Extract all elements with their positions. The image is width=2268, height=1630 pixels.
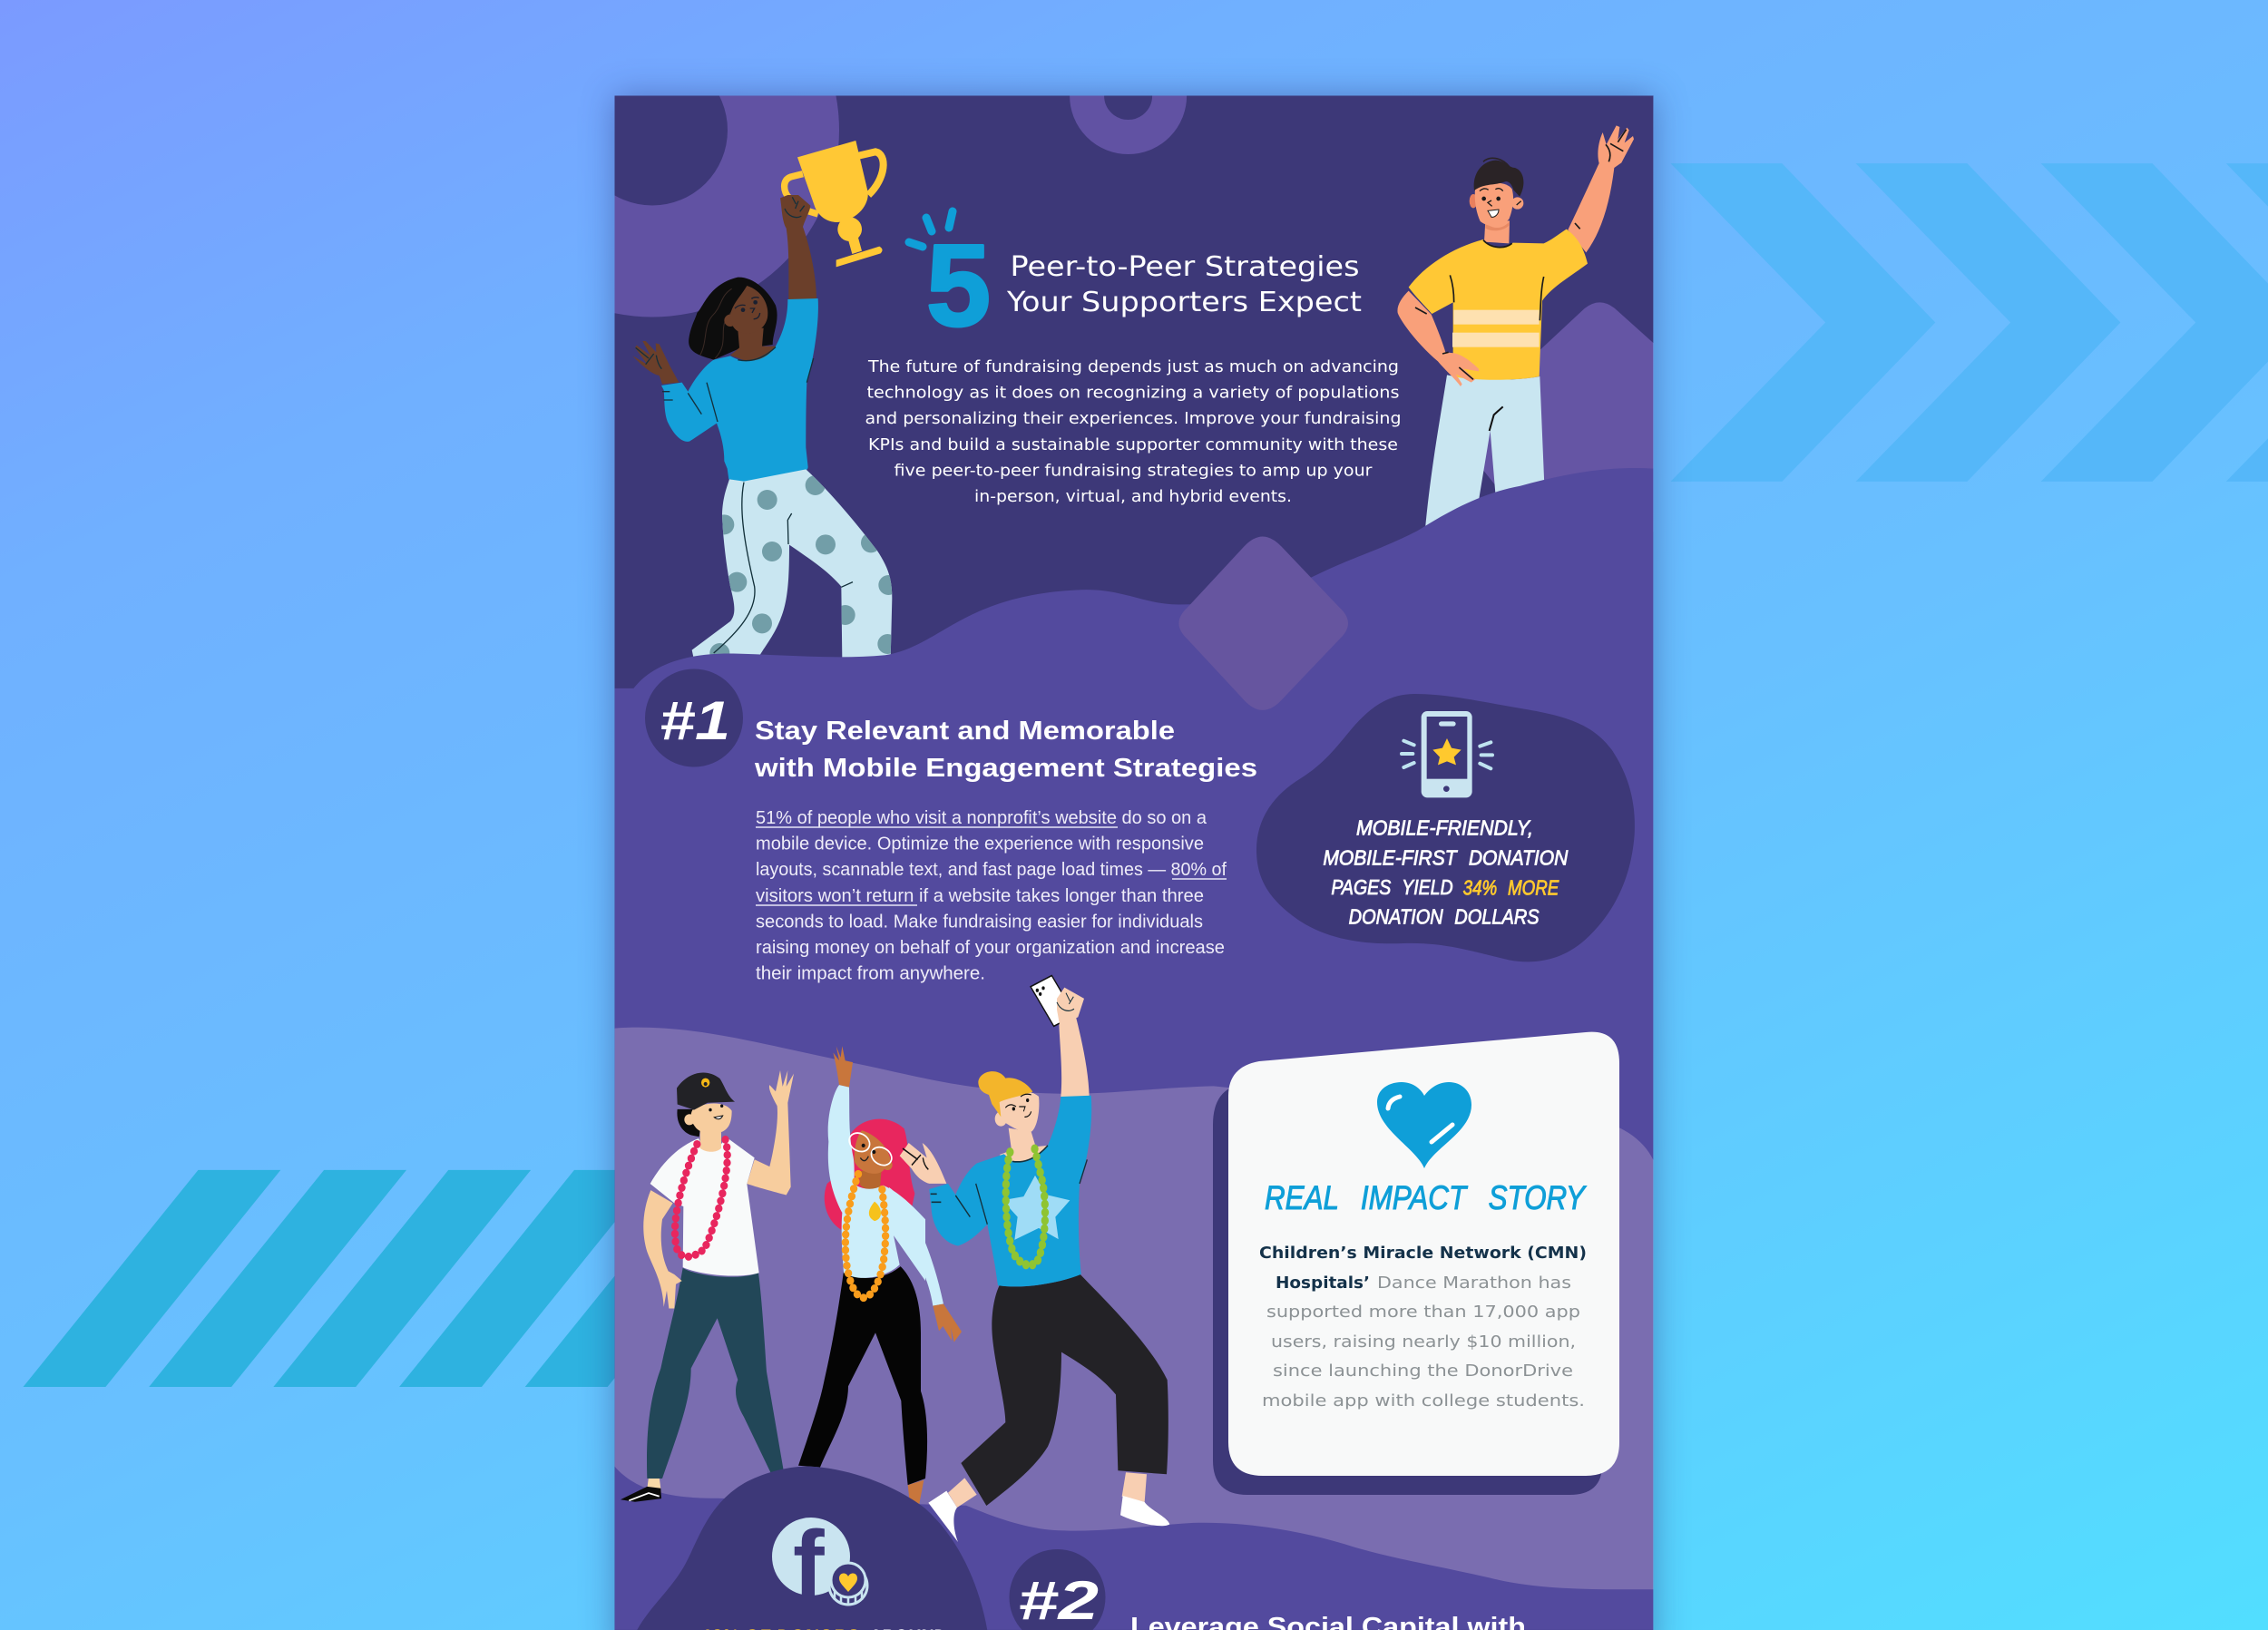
heading: strategy 1: with Mobile Engagement Strategies [754, 754, 1257, 783]
icon: phone with star [1402, 711, 1492, 797]
icon: number five with rays: 5 [926, 221, 991, 351]
body text: strategy 1 [756, 807, 1227, 984]
heading: strategy 1: Stay Relevant and Memorable [755, 717, 1175, 746]
icon: number five with rays [905, 207, 989, 328]
callout text: MOBILE-FIRST DONATION [1323, 845, 1569, 869]
decorative rounded diamond [1178, 537, 1348, 710]
callout: mobile stat [1256, 694, 1635, 961]
trophy [785, 141, 884, 267]
illustration: man waving [1397, 125, 1634, 532]
pants [1425, 375, 1544, 532]
wave: lilac section background [615, 1028, 1653, 1589]
illustration: woman taking selfie with green beads [889, 976, 1169, 1542]
title [1006, 251, 1362, 318]
decorative donut top [1087, 54, 1169, 137]
infographic panel [615, 96, 1653, 1630]
neck and head [1000, 1128, 1048, 1162]
illustration: woman with trophy [632, 141, 898, 663]
wave: medium purple section background [615, 468, 1653, 1630]
blue sweater [929, 1096, 1091, 1286]
card shadow [1213, 1084, 1602, 1495]
waving hand [632, 341, 679, 384]
card body text: mobile app with college students. [1262, 1391, 1585, 1410]
intro paragraph: in-person, virtual, and hybrid events. [974, 487, 1292, 506]
hand near face [900, 1143, 946, 1184]
callout text: 34% MORE [1463, 876, 1559, 900]
intro paragraph: KPIs and build a sustainable supporter community with these [868, 435, 1398, 454]
badge: number 2 [1009, 1549, 1105, 1630]
body text: strategy 1: 51% of people who visit a nonprofit’s website do so on a [756, 807, 1207, 828]
intro paragraph: five peer-to-peer fundraising strategies to amp up your [894, 461, 1373, 480]
callout text: DONATION DOLLARS [1349, 905, 1540, 929]
intro paragraph [865, 357, 1401, 506]
card body text: Dance Marathon has [1377, 1274, 1571, 1293]
green beads [1006, 1143, 1045, 1265]
background chevrons [1671, 163, 2268, 482]
hair [689, 278, 777, 360]
decorative mountain right [1483, 302, 1654, 532]
raised arm and hand [1568, 125, 1634, 252]
badge: number 2: #2 [1018, 1570, 1099, 1630]
card: real impact story [1228, 1032, 1619, 1476]
callout text [1323, 816, 1569, 929]
blob: facebook stat [637, 1467, 987, 1630]
callout text: MOBILE-FRIENDLY, [1356, 816, 1533, 840]
polka dot pants [692, 469, 892, 659]
body text: strategy 1: their impact from anywhere. [756, 963, 985, 984]
icon: facebook logo with coin [772, 1512, 867, 1617]
intro paragraph: and personalizing their experiences. Improve your fundraising [865, 409, 1401, 428]
title: Your Supporters Expect [1006, 287, 1362, 318]
raised arm and fist [780, 195, 816, 301]
left arm on hip [1397, 291, 1479, 386]
body text: strategy 1: visitors won’t return if a website takes longer than three [756, 885, 1204, 906]
neck and head [1484, 220, 1510, 243]
face and neck [730, 328, 776, 362]
card body text [1259, 1244, 1587, 1410]
illustration: woman with pink hair and orange beads [798, 1046, 927, 1504]
card body text: Children’s Miracle Network (CMN) [1259, 1244, 1587, 1263]
card body text: Hospitals’ [1276, 1274, 1370, 1293]
badge: number 1: #1 [660, 690, 730, 751]
badge: number 1 [645, 669, 743, 767]
card body text: since launching the DonorDrive [1273, 1362, 1573, 1381]
icon: facebook logo with coin: f [793, 1512, 825, 1617]
heading: strategy 1 [754, 717, 1257, 783]
yellow t-shirt [1409, 229, 1588, 380]
icon: blue heart [1377, 1082, 1471, 1168]
callout text: PAGES YIELD [1331, 875, 1453, 899]
body text: strategy 1: mobile device. Optimize the experience with responsive [756, 834, 1204, 854]
title: Peer-to-Peer Strategies [1011, 251, 1359, 283]
background diagonal stripes [24, 1170, 783, 1387]
body text: strategy 1: raising money on behalf of your organization and increase [756, 937, 1225, 958]
body text: strategy 1: layouts, scannable text, and fast page load times — 80% of [756, 859, 1227, 880]
intro paragraph: technology as it does on recognizing a variety of populations [867, 384, 1399, 403]
body text: strategy 1: seconds to load. Make fundraising easier for individuals [756, 911, 1203, 932]
intro paragraph: The future of fundraising depends just as much on advancing [867, 357, 1399, 376]
blue sweater [661, 298, 818, 482]
decorative ring top left [615, 96, 839, 317]
raised arm [1059, 1013, 1090, 1097]
card heading: REAL IMPACT STORY [1265, 1179, 1587, 1216]
star on sweater [1002, 1176, 1070, 1240]
card body text: supported more than 17,000 app [1266, 1303, 1580, 1322]
illustration: man with cap and red beads [621, 1070, 794, 1502]
card body text: users, raising nearly $10 million, [1271, 1332, 1576, 1352]
phone [1031, 976, 1075, 1026]
legs and feet [1122, 1472, 1147, 1502]
pink-haired woman's lowered arm [889, 1187, 943, 1306]
